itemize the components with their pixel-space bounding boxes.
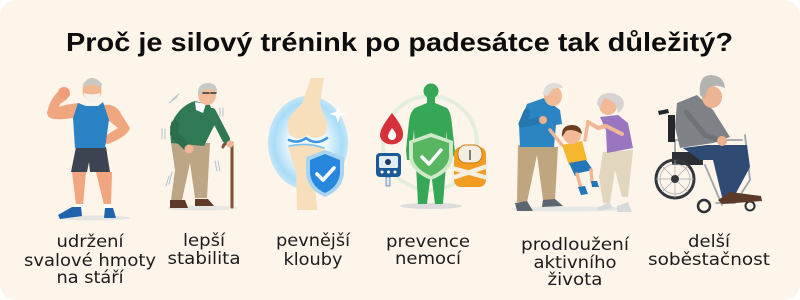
label: stability: stabilita	[168, 249, 240, 268]
icon: scale with tape measure	[452, 145, 488, 187]
label: active life: aktivního	[534, 253, 616, 272]
icon: unsteady older man with cane	[162, 83, 237, 210]
title: Proč je silový trénink po padesátce tak důležitý?	[66, 27, 733, 57]
label: self-sufficiency: delší	[688, 232, 732, 251]
icon: disease prevention	[376, 84, 488, 209]
label: muscle mass	[24, 232, 156, 287]
icon: knee joint with shield	[268, 78, 348, 210]
icon: glucose meter	[376, 153, 401, 186]
icon: muscular older man	[47, 78, 130, 220]
body silhouette	[400, 84, 462, 209]
icon: older man in wheelchair	[656, 75, 762, 212]
label: muscle mass: na stáří	[56, 268, 125, 287]
label: joints: pevnější	[276, 231, 352, 250]
label: muscle mass: udržení	[56, 232, 125, 251]
label: active life: prodloužení	[521, 235, 631, 254]
label: active life	[521, 235, 631, 289]
label: muscle mass: svalové hmoty	[24, 251, 156, 270]
label: active life: života	[548, 270, 602, 289]
shield	[409, 133, 453, 180]
label: self-sufficiency	[648, 232, 771, 269]
label: stability	[168, 231, 240, 268]
label: disease prevention: prevence	[386, 232, 470, 251]
decorative ring	[383, 96, 477, 190]
label: joints	[276, 231, 352, 269]
label: joints: klouby	[284, 250, 343, 269]
label: stability: lepší	[183, 231, 227, 250]
icon: grandparents playing with child	[512, 83, 633, 212]
icon: blood drop	[380, 113, 403, 144]
label: disease prevention	[386, 232, 470, 268]
label: disease prevention: nemocí	[395, 249, 463, 268]
label: self-sufficiency: soběstačnost	[648, 250, 771, 269]
